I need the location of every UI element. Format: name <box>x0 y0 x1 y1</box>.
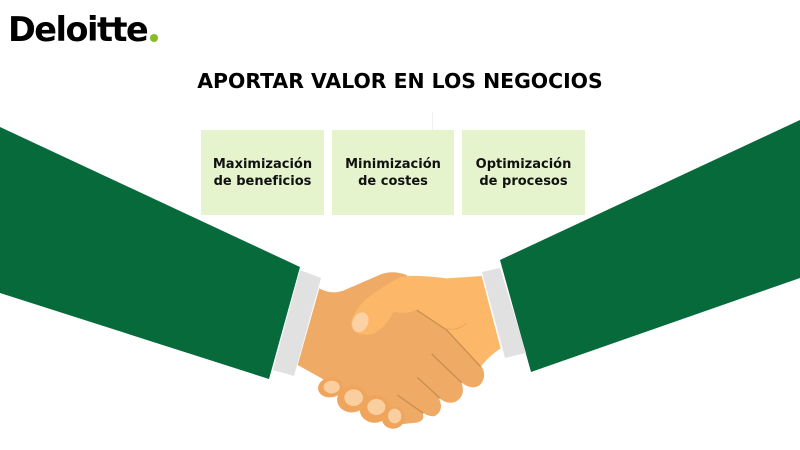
title: APORTAR VALOR EN LOS NEGOCIOS <box>197 69 603 93</box>
box: optimización de procesos: Optimización <box>476 156 571 172</box>
knuckles <box>316 375 408 432</box>
thumb crease <box>445 323 467 329</box>
right cuff <box>482 268 526 358</box>
box: maximización de beneficios: de beneficios <box>214 174 311 188</box>
hands <box>298 272 501 432</box>
logo: Deloitte: Deloitte <box>8 10 147 49</box>
box: minimización de costes: Minimización <box>345 156 441 172</box>
box: minimización de costes <box>332 130 454 215</box>
left cuff <box>273 270 321 376</box>
fingernails <box>324 381 401 423</box>
finger creases <box>397 310 481 413</box>
thumb nail <box>349 310 372 335</box>
dark hand <box>298 272 484 425</box>
box: optimización de procesos <box>462 130 585 215</box>
right sleeve <box>500 120 800 372</box>
box: maximización de beneficios: Maximización <box>213 156 312 172</box>
light hand <box>351 276 501 367</box>
box: optimización de procesos: de procesos <box>479 174 568 188</box>
left sleeve <box>0 127 300 379</box>
box: maximización de beneficios <box>201 130 324 215</box>
box: minimización de costes: de costes <box>358 174 428 188</box>
